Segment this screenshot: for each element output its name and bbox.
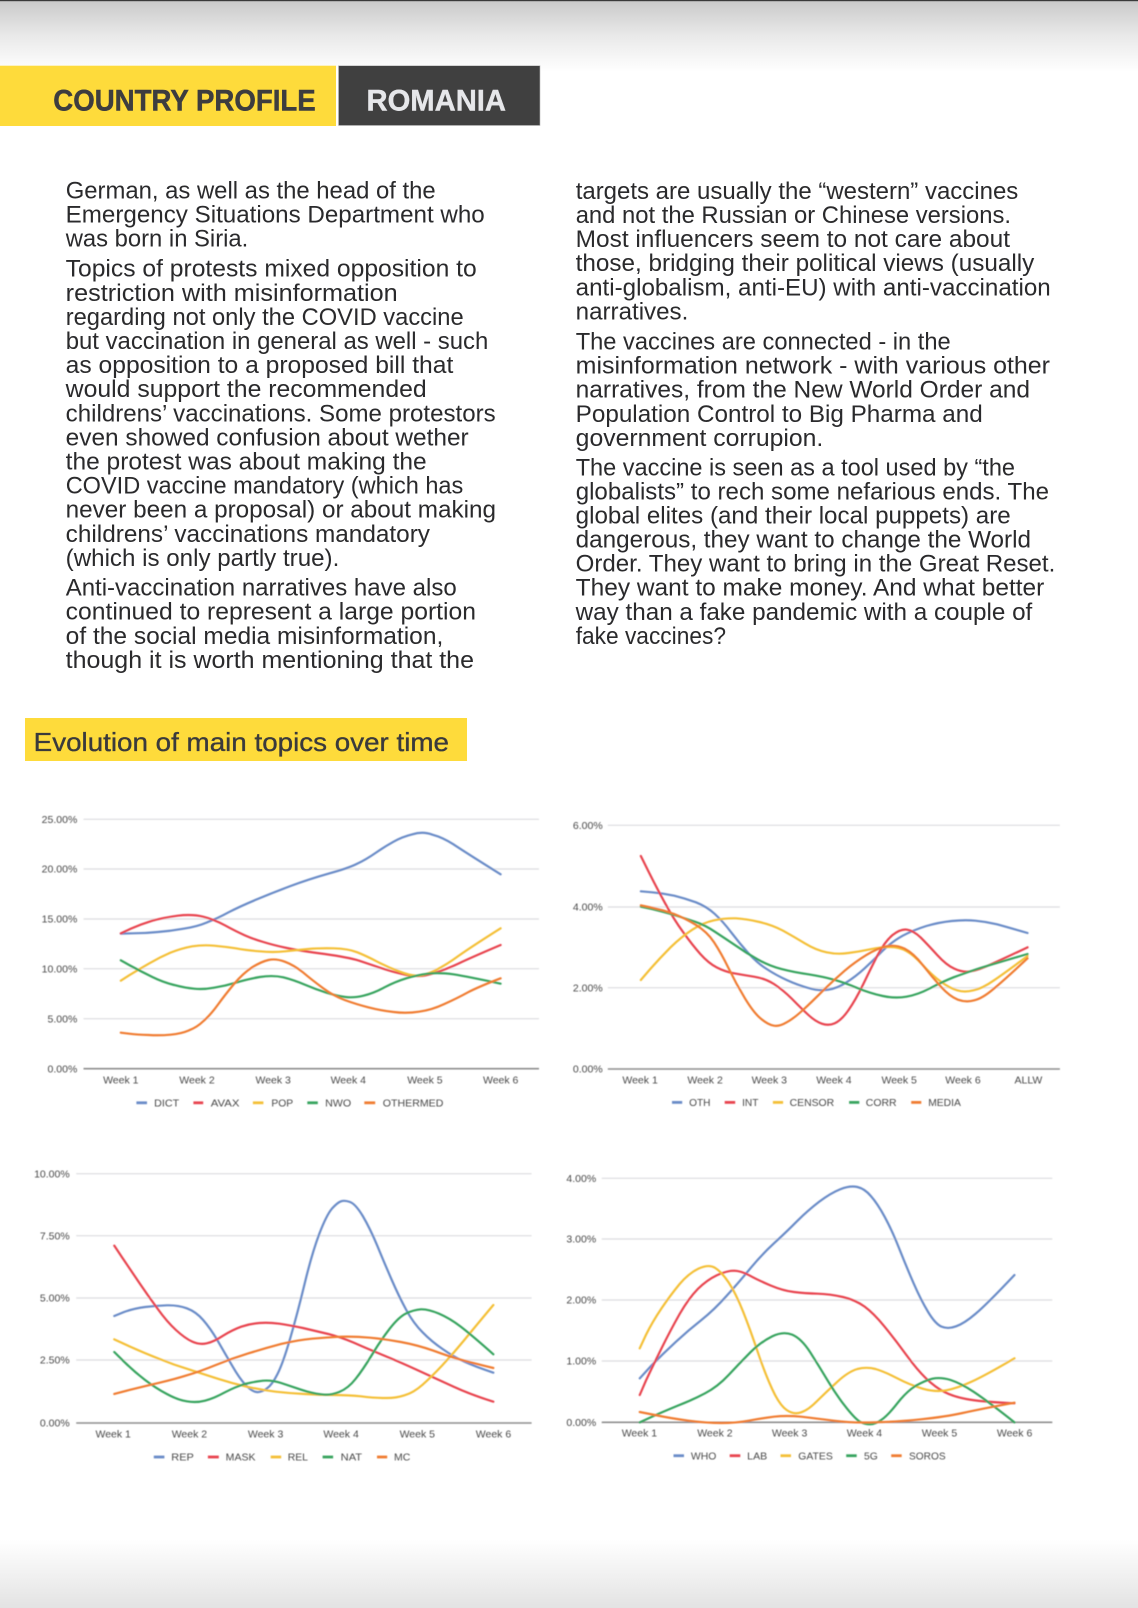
section heading: evolution of main topics bbox=[25, 718, 467, 761]
line chart: DICT, AVAX, POP, NWO, OTHERMED bbox=[42, 814, 539, 1109]
text column: right: targets are usually the “western” vaccines bbox=[576, 178, 1018, 205]
section heading: evolution of main topics: Evolution of main topics over time bbox=[34, 727, 449, 757]
y axis labels: 7.50% bbox=[40, 1230, 70, 1242]
y axis labels bbox=[573, 820, 603, 1076]
y axis labels: 6.00% bbox=[573, 820, 603, 832]
text column: right: government corrupion. bbox=[576, 425, 823, 452]
y axis labels: 1.00% bbox=[566, 1356, 596, 1368]
text column: right: dangerous, they want to change the World bbox=[576, 527, 1031, 554]
text column: left: German, as well as the head of the bbox=[66, 178, 436, 205]
data lines bbox=[114, 1201, 493, 1402]
text column: right: Most influencers seem to not care about bbox=[576, 226, 1010, 253]
x axis labels: Week 3 bbox=[752, 1074, 787, 1086]
x axis labels: Week 4 bbox=[323, 1429, 359, 1441]
text column: right: anti-globalism, anti-EU) with anti-vaccination bbox=[576, 274, 1051, 301]
text column: right: globalists” to rech some nefarious ends. The bbox=[576, 479, 1049, 506]
legend: OTHERMED bbox=[383, 1097, 444, 1109]
text column: right: those, bridging their political views (usually bbox=[576, 250, 1034, 277]
y axis labels: 0.00% bbox=[566, 1417, 596, 1429]
text column: left: even showed confusion about wether bbox=[66, 424, 469, 451]
legend: CENSOR bbox=[790, 1097, 835, 1109]
legend: MASK bbox=[226, 1452, 256, 1464]
text column: right: global elites (and their local puppets) are bbox=[576, 503, 1011, 530]
y axis labels: 4.00% bbox=[573, 902, 603, 914]
x axis labels: Week 2 bbox=[172, 1429, 207, 1441]
x axis labels: Week 6 bbox=[483, 1074, 519, 1086]
x axis labels: Week 1 bbox=[95, 1429, 131, 1441]
text column: left: of the social media misinformation, bbox=[66, 623, 443, 650]
x axis labels bbox=[95, 1429, 511, 1441]
text column: left: but vaccination in general as well - such bbox=[66, 328, 488, 355]
text column: left: restriction with misinformation bbox=[66, 280, 398, 307]
legend: REP bbox=[171, 1452, 194, 1464]
x axis labels: Week 6 bbox=[476, 1429, 511, 1441]
text column: right: misinformation network - with various other bbox=[576, 353, 1050, 380]
line chart: REP, MASK, REL, NAT, MC bbox=[34, 1168, 532, 1464]
x axis labels: Week 4 bbox=[331, 1074, 366, 1086]
y axis labels: 2.00% bbox=[573, 982, 603, 994]
text column: left: COVID vaccine mandatory (which has bbox=[66, 473, 463, 500]
text column: right: They want to make money. And what better bbox=[576, 575, 1044, 602]
x axis labels: Week 4 bbox=[847, 1428, 882, 1440]
text column: right bbox=[575, 178, 1055, 650]
x axis labels: Week 1 bbox=[622, 1074, 658, 1086]
legend: WHO bbox=[691, 1450, 716, 1462]
data lines bbox=[640, 1187, 1014, 1424]
data lines bbox=[121, 833, 501, 1035]
line chart: OTH, INT, CENSOR, CORR, MEDIA bbox=[573, 820, 1060, 1109]
text column: left: Emergency Situations Department who bbox=[66, 202, 485, 229]
legend bbox=[672, 1097, 961, 1109]
text column: left: (which is only partly true). bbox=[66, 545, 339, 572]
text column: left: though it is worth mentioning that the bbox=[66, 647, 474, 674]
banner label: country profile bbox=[0, 66, 336, 126]
x axis labels bbox=[622, 1428, 1032, 1440]
text column: left bbox=[65, 178, 496, 674]
y axis labels: 25.00% bbox=[42, 814, 77, 826]
text column: right: Population Control to Big Pharma and bbox=[576, 401, 983, 428]
legend: SOROS bbox=[909, 1450, 946, 1462]
text column: right: The vaccine is seen as a tool used by “the bbox=[576, 455, 1015, 482]
legend bbox=[674, 1450, 946, 1462]
text column: left: was born in Siria. bbox=[65, 226, 248, 253]
legend: NWO bbox=[325, 1097, 351, 1109]
x axis labels: Week 4 bbox=[816, 1074, 852, 1086]
y axis labels: 0.00% bbox=[573, 1064, 603, 1076]
x axis labels: Week 5 bbox=[407, 1074, 443, 1086]
text column: right: and not the Russian or Chinese versions. bbox=[576, 202, 1011, 229]
banner label: country profile: COUNTRY PROFILE bbox=[53, 85, 316, 118]
legend: INT bbox=[742, 1097, 759, 1109]
y axis labels: 2.50% bbox=[40, 1355, 70, 1367]
x axis labels: Week 5 bbox=[400, 1429, 435, 1441]
data lines bbox=[641, 856, 1028, 1026]
x axis labels: Week 5 bbox=[922, 1428, 957, 1440]
y axis labels bbox=[34, 1168, 70, 1430]
y axis labels: 5.00% bbox=[48, 1013, 77, 1025]
x axis labels: Week 6 bbox=[997, 1428, 1032, 1440]
legend: NAT bbox=[341, 1452, 363, 1464]
header banner bbox=[0, 66, 540, 126]
text column: left: as opposition to a proposed bill that bbox=[66, 352, 454, 379]
x axis labels: Week 2 bbox=[697, 1428, 733, 1440]
legend: OTH bbox=[689, 1097, 710, 1109]
x axis labels: Week 2 bbox=[687, 1074, 723, 1086]
legend: MC bbox=[394, 1452, 411, 1464]
y axis labels: 10.00% bbox=[34, 1168, 70, 1180]
legend: MEDIA bbox=[928, 1097, 961, 1109]
legend bbox=[136, 1097, 444, 1109]
banner label: Romania bbox=[338, 66, 540, 126]
y axis labels: 20.00% bbox=[42, 864, 77, 876]
text column: right: narratives, from the New World Order and bbox=[576, 377, 1030, 404]
x axis labels: Week 6 bbox=[945, 1074, 981, 1086]
text column: left: Anti-vaccination narratives have also bbox=[66, 575, 457, 602]
legend: POP bbox=[271, 1097, 293, 1109]
text column: right: The vaccines are connected - in the bbox=[576, 328, 951, 356]
text column: left: childrens’ vaccinations. Some protestors bbox=[66, 400, 496, 427]
text column: right: way than a fake pandemic with a couple of bbox=[575, 599, 1033, 626]
text column: right: narratives. bbox=[576, 298, 688, 326]
text column: left: the protest was about making the bbox=[66, 448, 427, 476]
text column: left: regarding not only the COVID vaccine bbox=[66, 304, 464, 331]
text column: left: would support the recommended bbox=[65, 376, 427, 403]
y axis labels: 3.00% bbox=[566, 1234, 596, 1246]
y axis labels bbox=[566, 1173, 596, 1429]
x axis labels: Week 5 bbox=[881, 1074, 917, 1086]
y axis labels: 15.00% bbox=[42, 914, 77, 926]
x axis labels: Week 3 bbox=[248, 1429, 283, 1441]
y axis labels: 0.00% bbox=[48, 1063, 77, 1075]
x axis labels bbox=[622, 1074, 1042, 1086]
y axis labels: 10.00% bbox=[42, 963, 77, 975]
x axis labels: Week 3 bbox=[255, 1074, 291, 1086]
legend bbox=[154, 1452, 411, 1464]
y axis labels bbox=[42, 814, 77, 1075]
y axis labels: 5.00% bbox=[40, 1293, 70, 1305]
legend: REL bbox=[288, 1452, 308, 1464]
line chart: WHO, LAB, GATES, 5G, SOROS bbox=[566, 1173, 1052, 1462]
y axis labels: 2.00% bbox=[566, 1295, 596, 1307]
legend: CORR bbox=[866, 1097, 897, 1109]
x axis labels bbox=[103, 1074, 519, 1086]
legend: LAB bbox=[747, 1450, 767, 1462]
text column: left: childrens’ vaccinations mandatory bbox=[66, 521, 430, 548]
text column: left: never been a proposal) or about making bbox=[66, 497, 496, 524]
x axis labels: Week 2 bbox=[179, 1074, 215, 1086]
banner label: Romania: ROMANIA bbox=[366, 85, 506, 118]
legend: AVAX bbox=[211, 1097, 240, 1109]
legend: GATES bbox=[798, 1450, 833, 1462]
y axis labels: 0.00% bbox=[40, 1418, 70, 1430]
text column: right: Order. They want to bring in the Great Reset. bbox=[576, 551, 1055, 578]
x axis labels: ALLW bbox=[1014, 1074, 1042, 1086]
x axis labels: Week 1 bbox=[103, 1074, 139, 1086]
legend: DICT bbox=[154, 1097, 180, 1109]
text column: left: continued to represent a large portion bbox=[66, 599, 476, 626]
x axis labels: Week 3 bbox=[772, 1428, 807, 1440]
x axis labels: Week 1 bbox=[622, 1428, 657, 1440]
legend: 5G bbox=[864, 1450, 878, 1462]
text column: left: Topics of protests mixed opposition to bbox=[66, 256, 477, 283]
text column: right: fake vaccines? bbox=[576, 623, 726, 650]
y axis labels: 4.00% bbox=[566, 1173, 596, 1185]
